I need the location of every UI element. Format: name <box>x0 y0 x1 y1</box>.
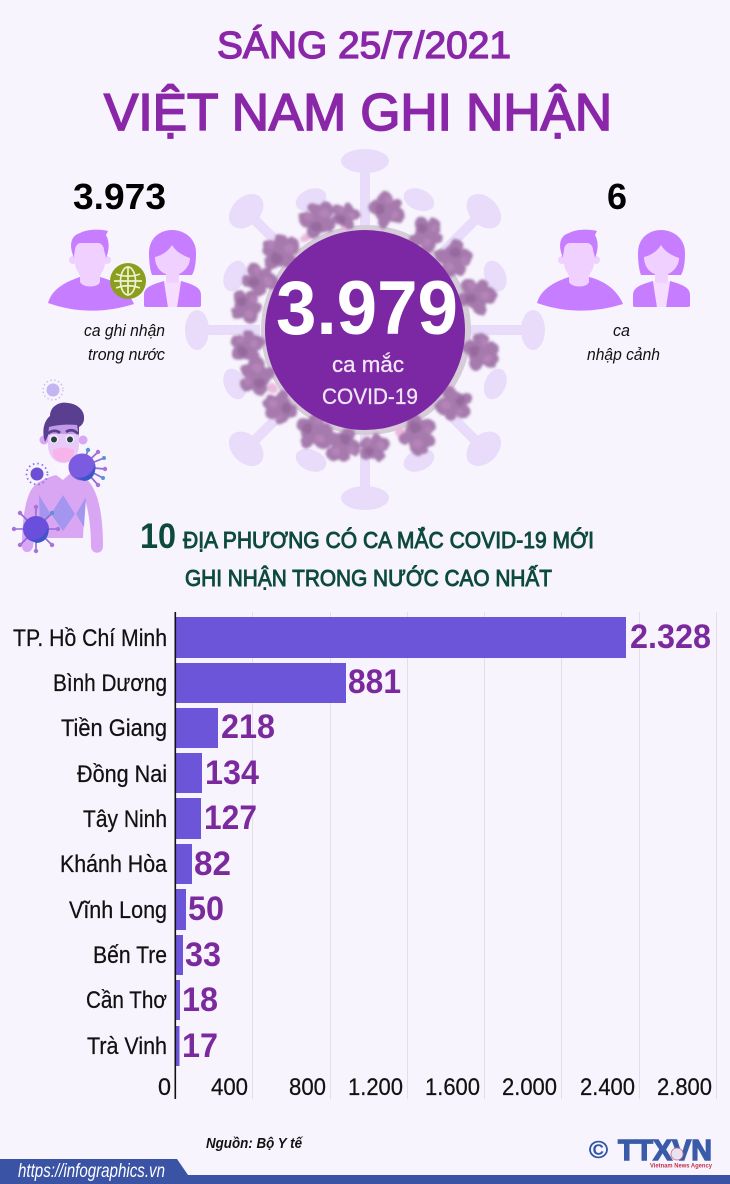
virus spikes <box>185 149 545 510</box>
category labels: Khánh Hòa <box>60 851 168 878</box>
title line 1: SÁNG 25/7/2021 <box>217 24 511 67</box>
value labels <box>182 618 711 1065</box>
value labels: 82 <box>194 845 231 883</box>
man <box>48 230 134 311</box>
imported caption: nhập cảnh <box>587 345 660 364</box>
value labels: 881 <box>348 663 401 701</box>
icon: imported couple <box>537 230 690 311</box>
axis tick labels: 2.800 <box>657 1074 712 1101</box>
category labels <box>13 625 168 1060</box>
virus illustration with total <box>185 149 545 510</box>
virus grey rim <box>261 225 471 435</box>
logo: TTXVN <box>589 1135 712 1170</box>
value labels: 2.328 <box>630 618 711 656</box>
axis tick labels: 1.600 <box>425 1074 480 1101</box>
woman <box>144 230 201 307</box>
heading line 1: ĐỊA PHƯƠNG CÓ CA MẮC COVID-19 MỚI <box>183 526 594 553</box>
icon: sick person with mask and viruses <box>12 380 107 553</box>
purple central disc <box>265 230 465 430</box>
imported cases number: 6 <box>607 176 627 217</box>
category labels: Bình Dương <box>53 670 167 697</box>
imported caption: ca <box>613 321 630 340</box>
category labels: Đồng Nai <box>77 761 167 788</box>
value labels: 33 <box>185 936 221 974</box>
category labels: Tây Ninh <box>83 806 167 833</box>
virus protein clusters <box>228 186 504 465</box>
axis tick labels: 400 <box>211 1074 248 1101</box>
face mask <box>53 448 74 462</box>
value labels: 134 <box>205 754 259 792</box>
globe mark <box>671 1148 683 1160</box>
value labels: 218 <box>221 708 275 746</box>
virus on shoulder <box>68 448 107 487</box>
value labels: 50 <box>188 890 224 928</box>
body <box>22 472 103 553</box>
eyes and brows <box>48 430 78 444</box>
total number: 3.979 <box>276 266 458 351</box>
heading number: 10 <box>140 517 176 556</box>
value labels: 127 <box>204 799 257 837</box>
ears <box>40 436 88 444</box>
vertical axis <box>174 612 176 1099</box>
total caption line 2: COVID-19 <box>322 384 418 409</box>
sweater diamonds <box>39 495 86 531</box>
category labels: Bến Tre <box>93 942 167 969</box>
small pale virus <box>43 380 63 400</box>
domestic caption: trong nước <box>88 345 165 364</box>
total caption line 1: ca mắc <box>332 352 404 377</box>
pink specks <box>265 221 473 437</box>
agency line: Vietnam News Agency <box>650 1162 712 1170</box>
category labels: Trà Vinh <box>87 1033 167 1060</box>
value labels: 17 <box>182 1027 218 1065</box>
axis tick labels: 2.400 <box>580 1074 635 1101</box>
globe <box>110 263 146 299</box>
category labels: Cần Thơ <box>86 987 167 1014</box>
axis tick labels: 0 <box>158 1074 171 1101</box>
man <box>537 230 623 311</box>
forehead band <box>48 424 79 434</box>
chart heading <box>140 517 594 591</box>
title line 2: VIỆT NAM GHI NHẬN <box>104 84 612 142</box>
footer band with url <box>0 1159 730 1184</box>
axis tick labels: 800 <box>289 1074 326 1101</box>
copyright mark: © <box>589 1137 608 1164</box>
domestic caption: ca ghi nhận <box>84 321 165 340</box>
bars <box>176 617 626 1066</box>
source note: Nguồn: Bộ Y tế <box>206 1135 303 1152</box>
category labels: Tiền Giang <box>61 715 167 742</box>
domestic cases number: 3.973 <box>73 176 166 217</box>
axis tick labels: 1.200 <box>348 1074 403 1101</box>
large virus at lower left <box>12 505 60 553</box>
value labels: 18 <box>182 981 218 1019</box>
category labels: TP. Hồ Chí Minh <box>13 625 167 652</box>
axis tick labels: 2.000 <box>502 1074 557 1101</box>
bar chart <box>13 612 716 1101</box>
small virus on the left <box>26 464 48 484</box>
wordmark: TTXVN <box>618 1135 712 1167</box>
url: https://infographics.vn <box>18 1161 165 1182</box>
head <box>48 425 79 463</box>
collar <box>55 464 71 479</box>
heading line 2: GHI NHẬN TRONG NƯỚC CAO NHẤT <box>185 564 552 591</box>
axis tick labels <box>158 1074 712 1101</box>
woman <box>633 230 690 307</box>
hair <box>43 403 84 442</box>
category labels: Vĩnh Long <box>69 897 167 924</box>
icon: domestic couple with globe <box>48 230 201 311</box>
